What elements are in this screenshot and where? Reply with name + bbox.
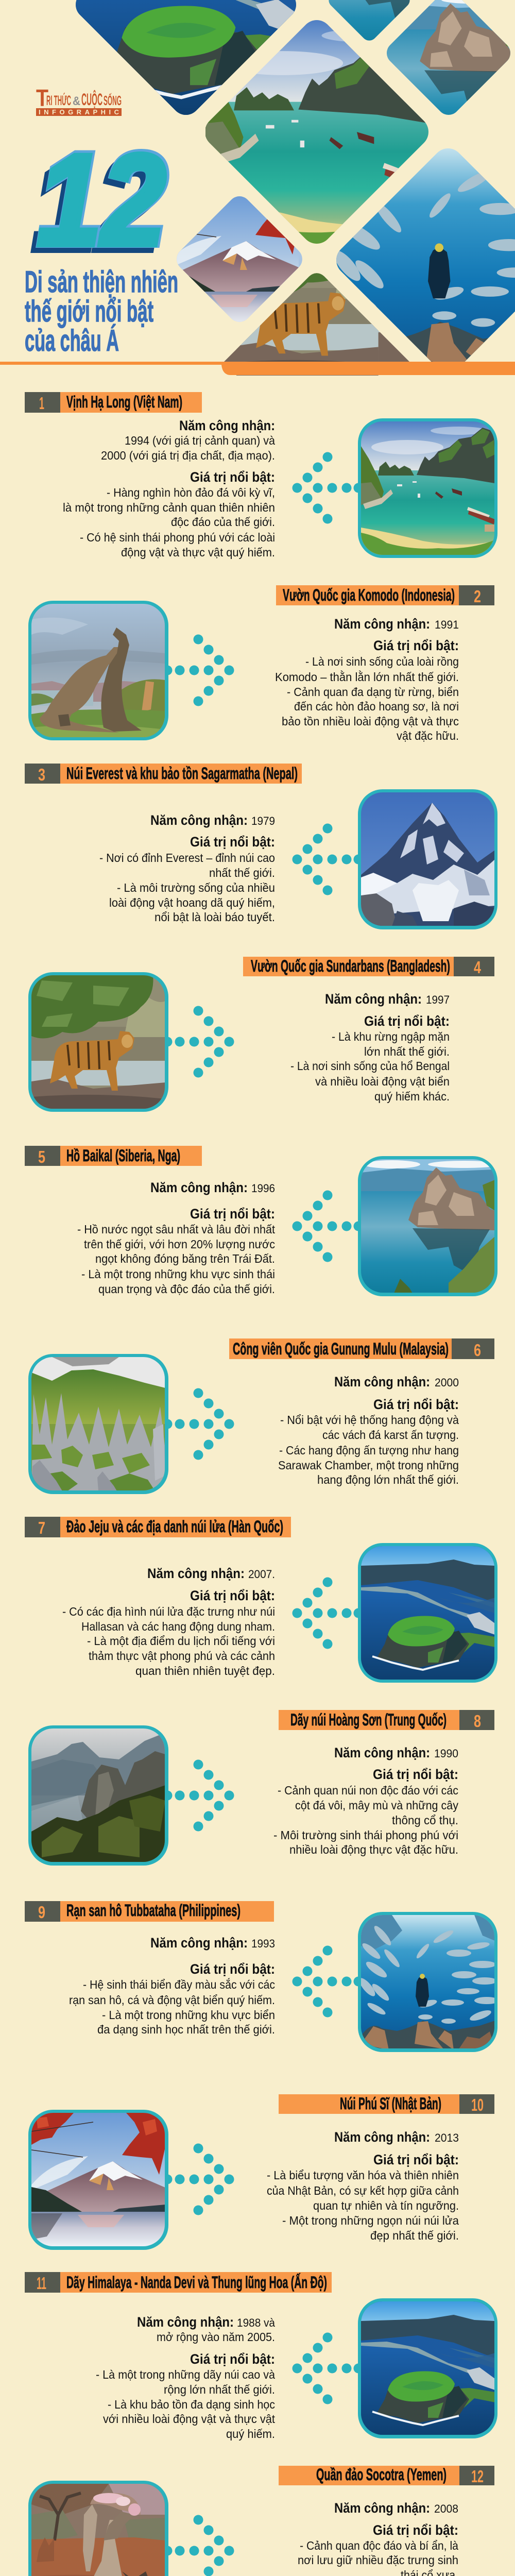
- photo: Mulu: [28, 1354, 168, 1494]
- text block: Năm công nhận:: [334, 2129, 430, 2145]
- photo: Hạ Long: [358, 418, 497, 558]
- photo: Hoàng Sơn: [28, 1725, 168, 1866]
- text block: và nhiều loài động vật biển: [315, 1075, 450, 1088]
- logo: RI THỨC: [46, 92, 71, 108]
- heading: 5: [38, 1147, 45, 1166]
- text block: 2007.: [248, 1568, 275, 1581]
- text block: Sarawak Chamber, một trong những: [278, 1459, 459, 1472]
- text block: với nhiều loài động vật và thực vật: [103, 2412, 276, 2426]
- panel: 1 Vịnh Hạ Long: [25, 392, 497, 559]
- text block: cột đá vôi, mây mù và những cây: [295, 1799, 458, 1812]
- photo diamond: small lake reflection: [329, 0, 410, 41]
- panel: 3 Everest: [25, 764, 497, 929]
- text block: 1990: [434, 1747, 458, 1760]
- arrow: dots: [293, 1578, 364, 1649]
- text block: 1993: [251, 1937, 275, 1950]
- heading: [25, 1146, 202, 1166]
- text block: [290, 991, 450, 1103]
- text block: - Cảnh quan độc đáo và bí ẩn, là: [300, 2539, 458, 2552]
- text block: Giá trị nổi bật:: [190, 469, 275, 485]
- heading: 7: [38, 1518, 45, 1537]
- logo: T: [36, 84, 48, 111]
- text block: [267, 2129, 459, 2242]
- photo diamond: Ha Long: [205, 20, 429, 244]
- arrow: dots: [163, 635, 234, 706]
- heading: 10: [471, 2095, 484, 2114]
- panel: 2 Komodo: [28, 585, 494, 742]
- photo: Everest: [358, 789, 497, 929]
- text block: quan tự nhiên và tín ngưỡng.: [313, 2199, 459, 2212]
- heading: Núi Phú Sĩ (Nhật Bản): [340, 2094, 441, 2113]
- arrow: dots: [163, 1388, 234, 1460]
- arrow: dots: [293, 823, 364, 895]
- panel: 4 Sundarbans: [28, 957, 494, 1112]
- text block: đa dạng sinh học nhất trên thế giới.: [97, 2023, 275, 2036]
- photo diamond: tiger: [216, 233, 422, 376]
- text block: - Là một trong những khu vực biển: [102, 2008, 275, 2022]
- photo: Phú Sĩ: [28, 2110, 168, 2250]
- text block: - Hàng nghìn hòn đảo đá vôi kỳ vĩ,: [107, 486, 275, 499]
- text block: Giá trị nổi bật:: [373, 638, 459, 653]
- main title: thế giới nổi bật: [25, 295, 153, 328]
- text block: - Cảnh quan đa dạng từ rừng, biển: [287, 685, 459, 699]
- text block: quý hiếm.: [226, 2427, 275, 2441]
- text block: Giá trị nổi bật:: [373, 2522, 458, 2538]
- text block: 1994 (với giá trị cảnh quan) và: [125, 434, 275, 447]
- text block: các vách đá karst ấn tượng.: [322, 1428, 459, 1442]
- text block: trên thế giới, với hơn 20% lượng nước: [84, 1238, 275, 1251]
- text block: Năm công nhận:: [334, 1374, 430, 1389]
- logo: &: [73, 94, 80, 108]
- hero panel: SỐNG: [104, 93, 122, 108]
- text block: rộng lớn nhất thế giới.: [164, 2383, 275, 2396]
- text block: Năm công nhận:: [150, 1180, 248, 1195]
- panel: 9 Tubbataha: [25, 1901, 500, 2054]
- heading: Dãy Himalaya - Nanda Devi và Thung lũng Hoa (Ấn Độ): [66, 2273, 327, 2292]
- heading: Núi Everest và khu bảo tồn Sagarmatha (Nepal): [66, 764, 298, 783]
- text block: quý hiếm khác.: [374, 1090, 450, 1103]
- text block: - Là nơi sinh sống của hổ Bengal: [290, 1059, 450, 1073]
- text block: [273, 1745, 458, 1856]
- arrow: dots: [163, 1760, 234, 1831]
- logo: [36, 84, 122, 116]
- text block: - Các hang động ấn tượng như hang: [279, 1444, 459, 1457]
- text block: 2008: [434, 2502, 458, 2515]
- heading: [279, 2465, 494, 2486]
- arrow: dots: [163, 2515, 234, 2576]
- photo: Komodo: [28, 601, 168, 740]
- text block: - Là khu rừng ngập mặn: [332, 1030, 450, 1043]
- text block: nhiều loài động thực vật đặc hữu.: [289, 1843, 458, 1856]
- text block: 2013: [435, 2131, 459, 2144]
- big number 12: 12: [32, 132, 161, 277]
- text block: Năm công nhận:: [150, 812, 248, 828]
- text block: - Nơi có đỉnh Everest – đỉnh núi cao: [99, 851, 275, 865]
- text block: - Nổi bật với hệ thống hang động và: [280, 1413, 459, 1427]
- photo diamond: reef: [328, 137, 515, 378]
- panel: 10 Phú Sĩ: [28, 2094, 494, 2250]
- text block: ngọt không đóng băng trên Trái Đất.: [95, 1252, 275, 1265]
- text block: - Một trong những ngọn núi núi lửa: [282, 2214, 459, 2227]
- arrow: dots: [293, 1190, 364, 1262]
- photo: Baikal: [358, 1156, 500, 1296]
- main title: của châu Á: [25, 324, 119, 358]
- text block: Năm công nhận:: [147, 1566, 245, 1581]
- text block: - Hồ nước ngọt sâu nhất và lâu đời nhất: [77, 1223, 276, 1236]
- heading: [279, 2094, 494, 2114]
- photo diamond: Jeju: [76, 0, 296, 115]
- heading: [25, 1901, 274, 1922]
- text block: - Hệ sinh thái biển đầy màu sắc với các: [83, 1978, 275, 1991]
- heading: [25, 764, 302, 784]
- arrow: dots: [163, 1006, 234, 1078]
- text block: Năm công nhận:: [334, 1745, 430, 1760]
- panel: 6 Gunung Mulu: [28, 1338, 494, 1494]
- text block: Giá trị nổi bật:: [190, 834, 275, 850]
- text block: độc đáo của thế giới.: [171, 515, 275, 529]
- text block: - Có các địa hình núi lửa đặc trưng như núi: [62, 1605, 275, 1618]
- text block: động vật và thực vật quý hiếm.: [121, 546, 275, 559]
- heading: 12: [471, 2467, 484, 2486]
- text block: - Là một địa điểm du lịch nổi tiếng với: [87, 1634, 275, 1648]
- text block: 1979: [251, 815, 275, 827]
- text block: [69, 1935, 275, 2036]
- text block: là một trong những cảnh quan thiên nhiên: [63, 501, 275, 514]
- photo: Socotra: [28, 2481, 168, 2576]
- photo diamond: Fuji: [165, 193, 304, 327]
- text block: 1991: [435, 618, 459, 631]
- big number 12: 12: [37, 128, 166, 273]
- text block: - Là nơi sinh sống của loài rồng: [305, 655, 459, 668]
- text block: Năm công nhận:: [334, 2500, 430, 2516]
- text block: loài động vật hoang dã quý hiếm,: [109, 896, 275, 909]
- photo: Jeju: [340, 1474, 515, 1690]
- text block: - Là khu bảo tồn đa dạng sinh học: [108, 2398, 275, 2411]
- text block: 1997: [426, 993, 450, 1006]
- text block: [96, 2314, 276, 2441]
- heading: Vịnh Hạ Long (Việt Nam): [66, 393, 182, 411]
- text block: [275, 616, 459, 742]
- text block: - Môi trường sinh thái phong phú với: [273, 1828, 458, 1842]
- text block: thông cổ thụ.: [392, 1814, 458, 1827]
- text block: [77, 1180, 276, 1296]
- heading: [25, 2272, 332, 2293]
- text block: đến các hòn đảo hoang sơ, là nơi: [294, 700, 459, 713]
- text block: quan trọng và độc đáo của thế giới.: [98, 1282, 275, 1296]
- arrow: dots: [163, 2143, 234, 2215]
- panel: 7 Jeju: [25, 1474, 515, 1690]
- text block: Năm công nhận:: [325, 991, 422, 1007]
- text block: vật đặc hữu.: [397, 729, 459, 742]
- arrow: dots: [293, 452, 364, 523]
- text block: - Là biểu tượng văn hóa và thiên nhiên: [267, 2168, 459, 2182]
- text block: nơi lưu giữ nhiều đặc trưng sinh: [298, 2553, 458, 2567]
- heading: 4: [474, 958, 481, 977]
- text block: Komodo – thằn lằn lớn nhất thế giới.: [275, 670, 459, 684]
- text block: [62, 1566, 275, 1677]
- photo: Sundarbans tiger: [28, 972, 168, 1112]
- text block: Giá trị nổi bật:: [190, 1961, 275, 1977]
- photo diamond: Baikal: [368, 0, 515, 142]
- heading: 1: [39, 394, 44, 413]
- text block: Giá trị nổi bật:: [373, 2152, 459, 2167]
- heading: Đảo Jeju và các địa danh núi lửa (Hàn Quốc): [66, 1517, 283, 1536]
- orange band: [0, 362, 515, 375]
- text block: [290, 2500, 458, 2576]
- photo: Tubbataha: [356, 1910, 500, 2054]
- text block: rạn san hô, cá và động vật biển quý hiếm.: [69, 1993, 275, 2007]
- heading: Hồ Baikal (Siberia, Nga): [66, 1146, 180, 1165]
- text block: quan thiên nhiên tuyệt đẹp.: [135, 1664, 275, 1677]
- text block: [99, 812, 275, 924]
- heading: Rạn san hô Tubbataha (Philippines): [66, 1901, 241, 1920]
- main title: Di sản thiện nhiên: [25, 265, 178, 299]
- text block: [63, 418, 275, 559]
- text block: Năm công nhận:: [334, 616, 430, 632]
- arrow: dots: [293, 2333, 364, 2404]
- heading: 9: [38, 1903, 45, 1922]
- text block: Giá trị nổi bật:: [190, 1588, 275, 1603]
- text block: hang động lớn nhất thế giới.: [317, 1473, 459, 1486]
- text block: - Là một trong những khu vực sinh thái: [81, 1267, 275, 1281]
- text block: nổi bật là loài báo tuyết.: [154, 910, 275, 924]
- heading: 3: [38, 765, 45, 784]
- big number 12: 12: [38, 127, 167, 272]
- arrow: dots: [293, 1945, 364, 2018]
- heading: 8: [474, 1711, 481, 1731]
- text block: - Cảnh quan núi non độc đáo với các: [278, 1784, 458, 1797]
- text block: Giá trị nổi bật:: [364, 1013, 450, 1029]
- text block: - Là một trong những dãy núi cao và: [96, 2368, 275, 2381]
- photo: Himalaya: [340, 2229, 515, 2446]
- text block: - Là môi trường sống của nhiều: [117, 881, 275, 894]
- main title: [25, 265, 178, 358]
- heading: 6: [474, 1341, 481, 1360]
- logo: INFOGRAPHIC: [39, 108, 119, 116]
- text block: của Nhật Bản, có sự kết hợp giữa cảnh: [267, 2184, 459, 2197]
- heading: [25, 392, 202, 413]
- text block: Giá trị nổi bật:: [373, 1767, 458, 1782]
- text block: Năm công nhận:: [137, 2314, 234, 2330]
- panel: 11 Himalaya: [25, 2229, 515, 2446]
- hero panel: [0, 0, 515, 378]
- heading: 11: [37, 2274, 46, 2293]
- text block: mở rộng vào năm 2005.: [157, 2330, 275, 2344]
- logo: CUỘC: [81, 90, 102, 109]
- text block: lớn nhất thế giới.: [364, 1045, 450, 1058]
- text block: nhất thế giới.: [209, 866, 275, 879]
- text block: [278, 1374, 459, 1486]
- text block: thảm thực vật phong phú và các cảnh: [89, 1649, 275, 1663]
- text block: bảo tồn nhiều loài động vật và thực: [282, 715, 459, 728]
- panel: 5 Baikal: [25, 1146, 500, 1296]
- text block: Giá trị nổi bật:: [373, 1397, 459, 1412]
- panel: 12 Socotra: [28, 2465, 494, 2576]
- text block: đẹp nhất thế giới.: [370, 2229, 459, 2242]
- text block: Giá trị nổi bật:: [190, 2351, 275, 2367]
- text block: 1988 và: [237, 2316, 276, 2329]
- heading: [25, 1517, 291, 1537]
- heading: 2: [474, 587, 481, 606]
- panel: 8 Hoàng Sơn: [28, 1710, 494, 1866]
- text block: Năm công nhận:: [150, 1935, 248, 1951]
- text block: Hallasan và các hang động dung nham.: [81, 1620, 275, 1633]
- text block: Giá trị nổi bật:: [190, 1206, 275, 1222]
- text block: - Có hệ sinh thái phong phú với các loài: [80, 531, 275, 544]
- text block: Năm công nhận:: [179, 418, 275, 433]
- text block: 1996: [251, 1182, 275, 1195]
- text block: 2000 (với giá trị địa chất, địa mạo).: [101, 449, 275, 462]
- text block: 2000: [435, 1376, 459, 1389]
